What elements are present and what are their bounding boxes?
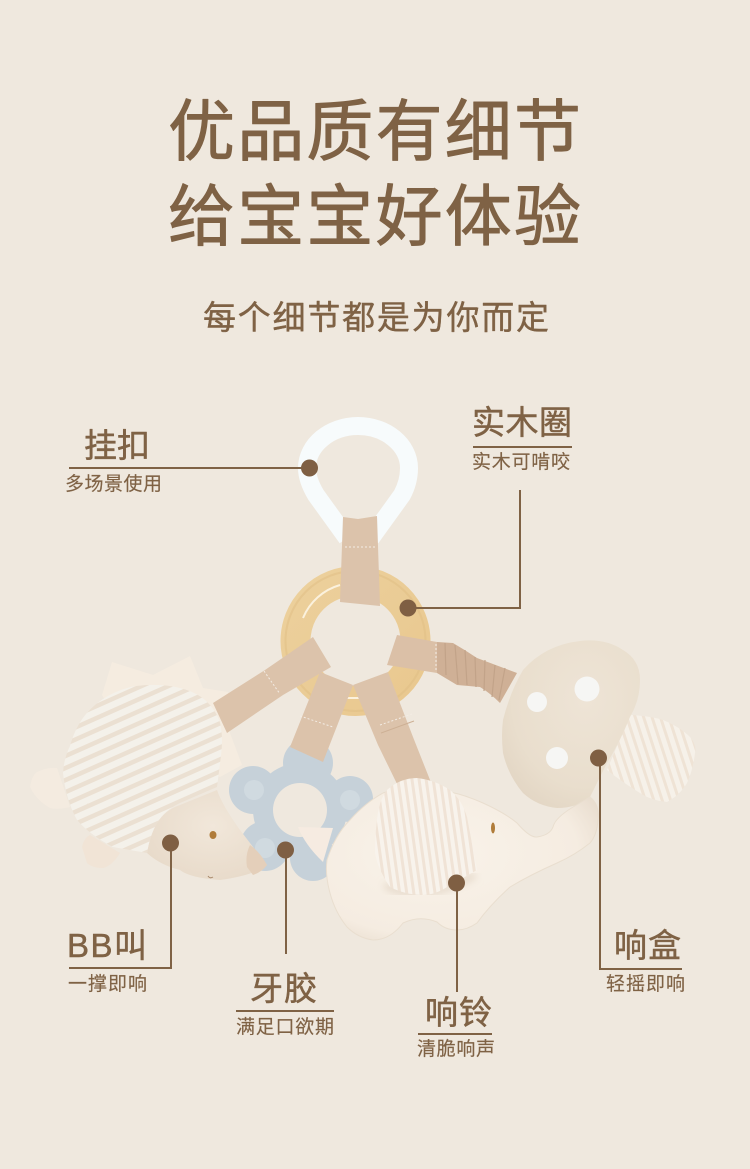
callout: clip: 挂扣 xyxy=(84,427,150,464)
callout: clip xyxy=(65,427,318,495)
callout: wooden ring: 实木圈 xyxy=(472,404,572,441)
callout: teether: 牙胶 xyxy=(250,970,317,1007)
title xyxy=(168,95,581,255)
strap: middle to teether xyxy=(290,672,353,762)
callout: rattle box xyxy=(590,750,685,995)
callout: clip: 多场景使用 xyxy=(65,473,162,495)
strap: left xyxy=(213,637,331,733)
callout: rattle box: 响盒 xyxy=(614,927,681,964)
callout: rattle box: 轻摇即响 xyxy=(606,973,685,995)
toy illustration xyxy=(30,426,695,940)
icon: teether xyxy=(229,738,373,881)
elastic strap to mushroom xyxy=(437,642,517,703)
strap: right to elephant xyxy=(353,672,432,790)
head xyxy=(147,790,267,880)
callout: bell: 响铃 xyxy=(425,994,492,1031)
striped body xyxy=(63,685,222,853)
strap: top xyxy=(340,516,380,606)
callout: wooden ring: 实木可啃咬 xyxy=(472,451,570,473)
callout: teether xyxy=(236,842,334,1038)
callout: bell: 清脆响声 xyxy=(417,1038,495,1060)
callout: wooden ring xyxy=(400,404,572,616)
icon: hedgehog xyxy=(30,637,331,880)
icon: wooden ring xyxy=(286,571,426,711)
callout: squeaker: BB叫 xyxy=(67,927,147,964)
title: 给宝宝好体验 xyxy=(168,180,581,255)
callout: squeaker xyxy=(67,834,179,995)
icon: white plastic clip xyxy=(307,426,409,538)
icon: elephant xyxy=(298,778,598,940)
icon: mushroom xyxy=(502,640,695,808)
title: 优品质有细节 xyxy=(168,95,581,170)
callout: bell xyxy=(417,874,495,1060)
callout: squeaker: 一撑即响 xyxy=(68,973,147,995)
callout: teether: 满足口欲期 xyxy=(236,1016,334,1038)
subtitle: 每个细节都是为你而定 xyxy=(203,299,549,336)
strap: upper right xyxy=(387,635,437,673)
spikes and feet xyxy=(102,656,242,777)
